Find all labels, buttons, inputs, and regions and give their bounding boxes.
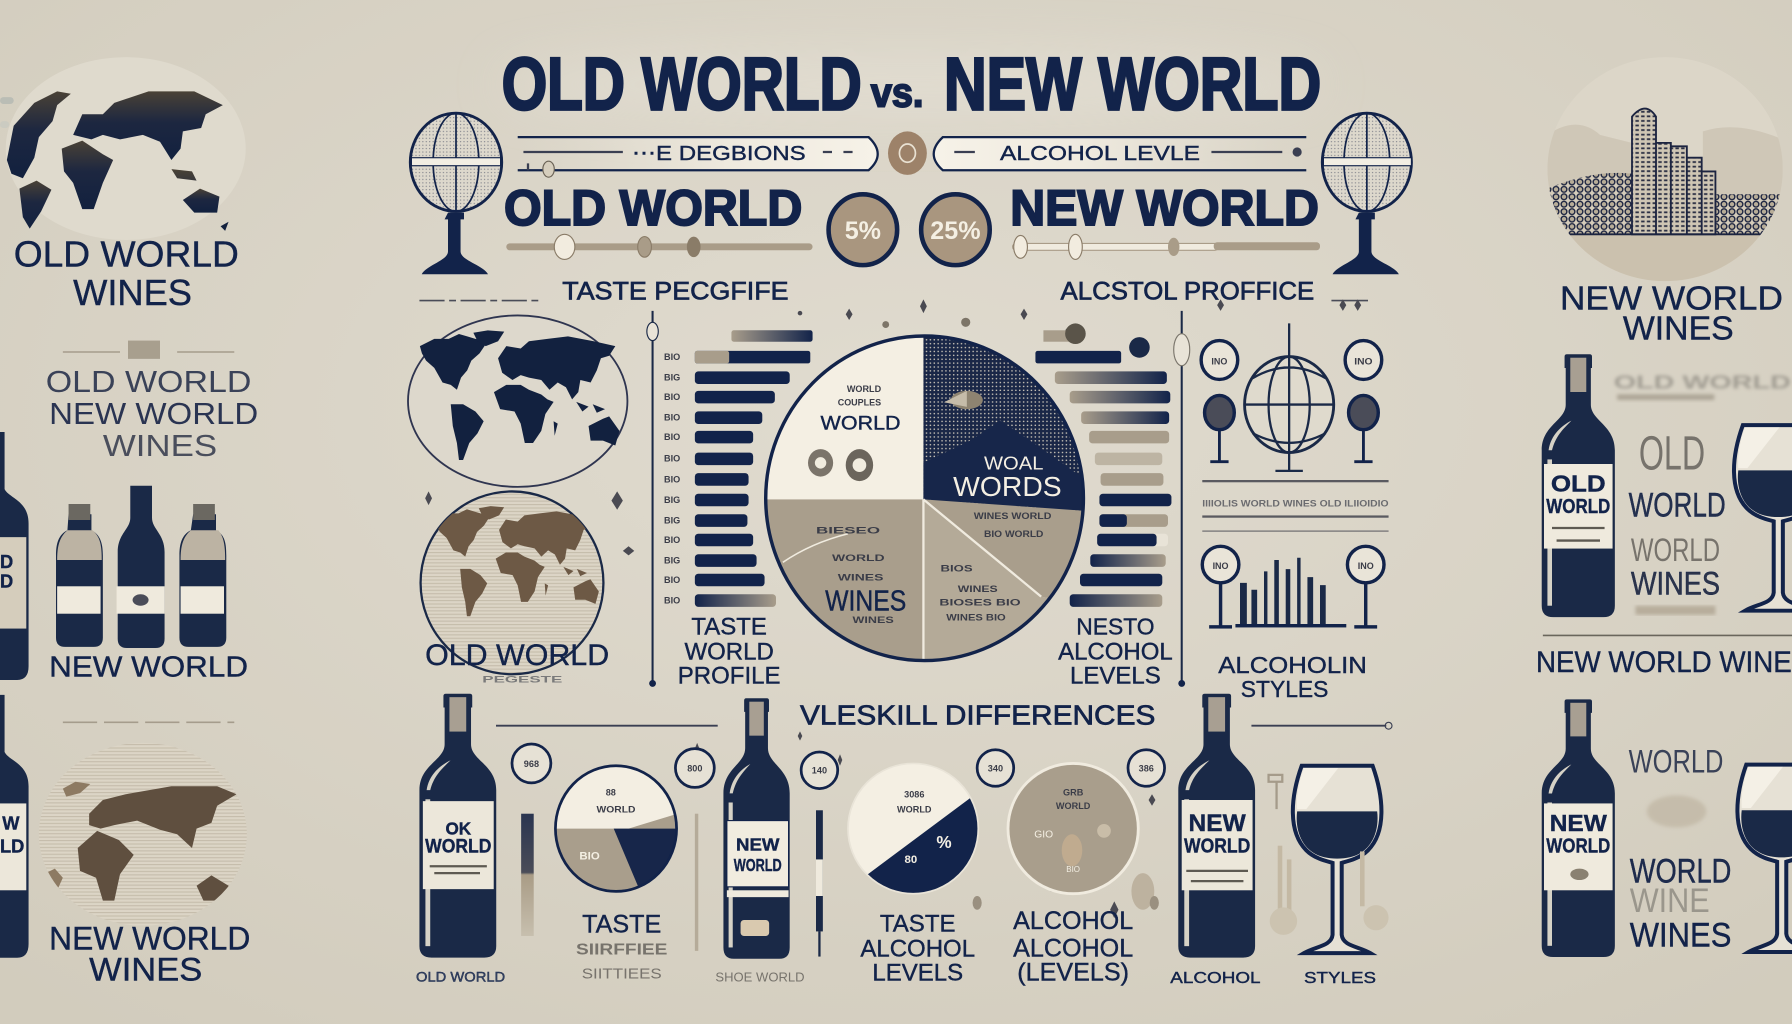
- bottle: new world label: [723, 698, 790, 959]
- left column: new world map: [39, 722, 247, 926]
- pie chart: central: WORLD: [847, 384, 882, 394]
- right column: wine glass one: [1734, 425, 1792, 611]
- pie: alcohol levels: [1008, 763, 1138, 894]
- label: old world map: OLD WORLD: [425, 639, 609, 672]
- right column: heading new world wines: WINES: [1623, 310, 1734, 347]
- left column: heading new world wines: WINES: [89, 952, 202, 988]
- badge: taste figure two: [675, 749, 714, 787]
- ribbon: alcohol levels: ALCOHOL LEVLE: [1000, 142, 1200, 165]
- pie chart: central: WORLD: [832, 553, 885, 563]
- badge: 25 percent: [921, 194, 990, 265]
- left column: heading old and new world wines: OLD WORLD: [46, 364, 251, 399]
- label: alcohol levels: NESTO: [1076, 613, 1155, 639]
- badge: taste figure one: 968: [524, 759, 539, 769]
- ornaments: scattered marks: [0, 97, 1361, 917]
- bottle: old world label: OK: [445, 818, 472, 838]
- label: alcohol levels repeated: ALCOHOL: [1013, 935, 1133, 963]
- right column: wine glass two: [1737, 765, 1792, 952]
- pie: taste: BIO: [579, 850, 600, 862]
- left column: cropped bottle old: D: [0, 570, 13, 591]
- pie: taste and alcohol: 3086: [904, 790, 924, 800]
- pie chart: central: BIOS: [941, 563, 973, 573]
- left column: cropped bottle old: D: [0, 551, 13, 572]
- pie: taste and alcohol: %: [936, 832, 952, 852]
- badge: taste figure one: [512, 744, 551, 783]
- bar chart: taste profile: BIO: [664, 392, 680, 402]
- label: taste world profile: WORLD: [684, 638, 774, 665]
- label: taste alcohol levels: LEVELS: [872, 960, 963, 987]
- pie chart: central: BIO WORLD: [984, 529, 1044, 539]
- main title: OLD WORLD: [502, 43, 862, 126]
- main title: vs.: [871, 69, 923, 115]
- label: taste styles: [576, 911, 668, 982]
- icon: globe with pins: INO: [1211, 357, 1227, 367]
- label: alcohol styles: [1218, 652, 1367, 702]
- caption row: SHOE WORLD: [715, 971, 805, 985]
- label: taste world profile: [678, 613, 780, 689]
- pie: taste: WORLD: [597, 805, 636, 815]
- badge: alcohol figure three: 386: [1139, 763, 1154, 773]
- label: alcohol levels repeated: [1013, 907, 1133, 987]
- pie chart: central: BIESEO: [816, 526, 880, 536]
- bottle: new world tall: [1178, 694, 1255, 958]
- pie chart: central: WORDS: [953, 471, 1062, 502]
- left column: heading new world wines: NEW WORLD: [49, 921, 250, 957]
- label: taste alcohol levels: ALCOHOL: [860, 936, 975, 963]
- pie: alcohol levels: WORLD: [1056, 801, 1091, 811]
- pie: taste and alcohol: WORLD: [897, 805, 932, 815]
- badge: alcohol figure two: 340: [988, 763, 1003, 773]
- bottle: new world tall: WORLD: [1184, 835, 1250, 858]
- label: taste styles: SIITTIEES: [582, 966, 662, 982]
- right column: stacked text new world: [1629, 744, 1731, 954]
- label: taste world profile: TASTE: [691, 613, 767, 640]
- medallion: [888, 131, 927, 175]
- bar chart: taste profile: BIG: [664, 495, 680, 505]
- right column: stacked text new world: WORLD: [1630, 852, 1731, 890]
- world map: old world navy: [408, 315, 627, 487]
- wine glass: bottom: [1293, 766, 1381, 953]
- slider: old world: [506, 234, 813, 259]
- right column: bottle old world: WORLD: [1546, 495, 1610, 518]
- label: alcohol levels: [1058, 613, 1173, 689]
- pie chart: central: COUPLES: [838, 398, 881, 408]
- right column: heading new world wines: NEW WORLD: [1560, 281, 1783, 318]
- pie chart: central: WINES: [853, 615, 894, 625]
- caption row: OLD WORLD: [416, 970, 505, 985]
- badge: 5 percent: [829, 194, 897, 265]
- label: taste styles: SIIRFFIEE: [576, 941, 668, 958]
- left column: cropped bottle new: [0, 695, 29, 958]
- badge: taste figure two: 800: [687, 763, 702, 773]
- pie: alcohol levels: GIO: [1034, 830, 1053, 841]
- icon: globe with pins: [1201, 323, 1382, 471]
- right column: stacked text new world: WINE: [1630, 882, 1710, 920]
- bar chart: alcohol profile: [1035, 323, 1171, 607]
- section heading: alcohol profile: ALCSTOL PROFFICE: [1061, 277, 1314, 305]
- bar chart: taste profile: BIO: [664, 352, 680, 362]
- section heading: taste profile: TASTE PECGFIFE: [562, 277, 789, 305]
- bottle: old world label: [419, 694, 496, 958]
- label: alcohol styles: ALCOHOLIN: [1218, 652, 1367, 678]
- main title: [499, 43, 1322, 126]
- pie: alcohol levels: GRB: [1063, 787, 1084, 797]
- pie chart: central: WINES: [825, 585, 906, 617]
- bar chart: taste profile: BIO: [664, 535, 680, 545]
- right column: stacked text old world: OLD: [1639, 428, 1705, 481]
- pie chart: central: WINES: [838, 573, 883, 583]
- ribbon: regions: ⋯E DEGBIONS: [632, 142, 806, 165]
- label: taste world profile: PROFILE: [678, 662, 780, 689]
- right column: stacked text old world: WORLD: [1631, 532, 1720, 568]
- icon: tasting spoons: [1270, 846, 1389, 935]
- label: alcohol styles: STYLES: [1241, 676, 1328, 702]
- right column: bottle old world: [1542, 354, 1615, 617]
- ribbon: regions: [518, 137, 878, 177]
- icon: right globe on stand: [1322, 113, 1411, 274]
- pie: taste and alcohol: 80: [905, 854, 917, 866]
- label: alcohol levels: ALCOHOL: [1058, 638, 1173, 665]
- main title: NEW WORLD: [944, 43, 1321, 126]
- bottle: new world label: WORLD: [734, 855, 782, 875]
- caption row: [416, 970, 1376, 987]
- heading: new world: NEW WORLD: [1010, 179, 1319, 236]
- label: old world map: PEGESTE: [482, 674, 562, 684]
- left column: cropped bottle new: LD: [0, 836, 24, 857]
- right column: stacked text old world: WORLD: [1629, 487, 1726, 525]
- bar: vertical gauge one: [521, 814, 534, 936]
- slider: new world: [1013, 234, 1320, 259]
- bar chart: taste profile: [664, 330, 813, 607]
- pie: taste: [554, 766, 678, 894]
- bar chart: taste profile: BIG: [664, 373, 680, 383]
- pie chart: central: WINES: [958, 584, 998, 594]
- heading: old world: OLD WORLD: [504, 179, 802, 236]
- heading: differences: [496, 700, 1392, 731]
- axis: left vertical: [647, 311, 658, 687]
- axis: right vertical: [1174, 311, 1190, 687]
- ribbon: alcohol levels: [934, 137, 1306, 170]
- right column: bottle new world: WORLD: [1546, 835, 1610, 858]
- right column: stacked text new world: WINES: [1630, 916, 1731, 954]
- pie: alcohol levels: BIO: [1066, 865, 1080, 874]
- left column: cropped bottle old: [0, 432, 29, 680]
- right column: stacked text old world: WINES: [1631, 565, 1720, 601]
- left column: heading new world wines: [49, 921, 250, 988]
- right column: stacked text new world: WORLD: [1629, 744, 1723, 780]
- left column: heading old world wines: [14, 233, 239, 313]
- right column: landscape with bottles skyline: [1548, 108, 1782, 281]
- right column: bottle new world: NEW: [1550, 810, 1607, 836]
- text lines: fine print: IIIIOLIS WORLD WINES OLD ILIIOIDIO: [1202, 498, 1389, 508]
- heading: differences: VLESKILL DIFFERENCES: [800, 700, 1155, 731]
- label: taste alcohol levels: [860, 910, 975, 987]
- badge: alcohol figure three: [1128, 750, 1165, 786]
- label: alcohol levels repeated: ALCOHOL: [1013, 907, 1133, 935]
- chart: alcohol styles skyline: INO: [1213, 561, 1229, 571]
- badge: 5 percent: 5%: [845, 217, 881, 245]
- pie chart: central: [766, 336, 1087, 665]
- left column: three small bottles: [56, 486, 226, 648]
- left column: label new world: NEW WORLD: [49, 652, 248, 684]
- right column: bottle new world: [1542, 699, 1615, 957]
- pie chart: central: WINES WORLD: [974, 511, 1052, 521]
- pie: taste and alcohol: [846, 760, 983, 897]
- bar chart: taste profile: BIG: [664, 555, 680, 565]
- bottle: old world label: WORLD: [425, 836, 491, 858]
- bar chart: taste profile: BIO: [664, 454, 680, 464]
- left column: heading old and new world wines: [46, 341, 258, 463]
- bottle: new world label: NEW: [736, 834, 780, 854]
- left column: heading old world wines: WINES: [73, 272, 192, 313]
- pie chart: central: WOAL: [984, 453, 1043, 474]
- left column: heading old and new world wines: WINES: [103, 428, 217, 463]
- right column: stacked text old world: OLD WORLD: [1614, 372, 1791, 393]
- right column: stacked text old world: [1614, 372, 1791, 615]
- badge: 25 percent: 25%: [930, 217, 981, 245]
- badge: alcohol figure one: 140: [812, 766, 827, 776]
- right column: heading new world wines: [1560, 281, 1783, 347]
- left column: world map: [6, 57, 246, 240]
- bar: vertical gauge three: [816, 810, 823, 957]
- bottle: new world tall: NEW: [1189, 810, 1246, 837]
- chart: alcohol styles skyline: [1202, 546, 1384, 629]
- chart: alcohol styles skyline: INO: [1358, 561, 1374, 571]
- world map: old world brown globe: [421, 491, 603, 674]
- badge: alcohol figure two: [977, 750, 1014, 786]
- label: alcohol levels: LEVELS: [1070, 662, 1161, 689]
- pie chart: central: BIOSES BIO: [939, 598, 1021, 608]
- label: alcohol levels repeated: (LEVELS): [1017, 959, 1129, 987]
- caption row: ALCOHOL: [1170, 970, 1261, 987]
- badge: alcohol figure one: [801, 752, 838, 789]
- left column: heading old world wines: OLD WORLD: [14, 233, 239, 274]
- bar chart: taste profile: BIO: [664, 432, 680, 442]
- right column: bottle old world: OLD: [1551, 470, 1606, 496]
- bar chart: taste profile: BIO: [664, 595, 680, 605]
- bar: vertical gauge two: [695, 814, 698, 951]
- caption row: STYLES: [1304, 970, 1376, 987]
- left column: cropped bottle new: W: [2, 813, 20, 834]
- label: taste alcohol levels: TASTE: [880, 910, 955, 937]
- bar chart: taste profile: BIO: [664, 413, 680, 423]
- label: taste styles: TASTE: [582, 911, 661, 939]
- left column: heading old and new world wines: NEW WORLD: [49, 396, 258, 431]
- bar chart: taste profile: BIO: [664, 474, 680, 484]
- bar chart: taste profile: BIO: [664, 575, 680, 585]
- pie chart: central: WORLD: [821, 413, 901, 435]
- pie chart: central: WINES BIO: [946, 613, 1006, 623]
- icon: left globe on stand: [410, 113, 502, 274]
- bar chart: taste profile: BIG: [664, 515, 680, 525]
- pie: taste: 88: [606, 787, 616, 797]
- icon: globe with pins: INO: [1354, 357, 1373, 367]
